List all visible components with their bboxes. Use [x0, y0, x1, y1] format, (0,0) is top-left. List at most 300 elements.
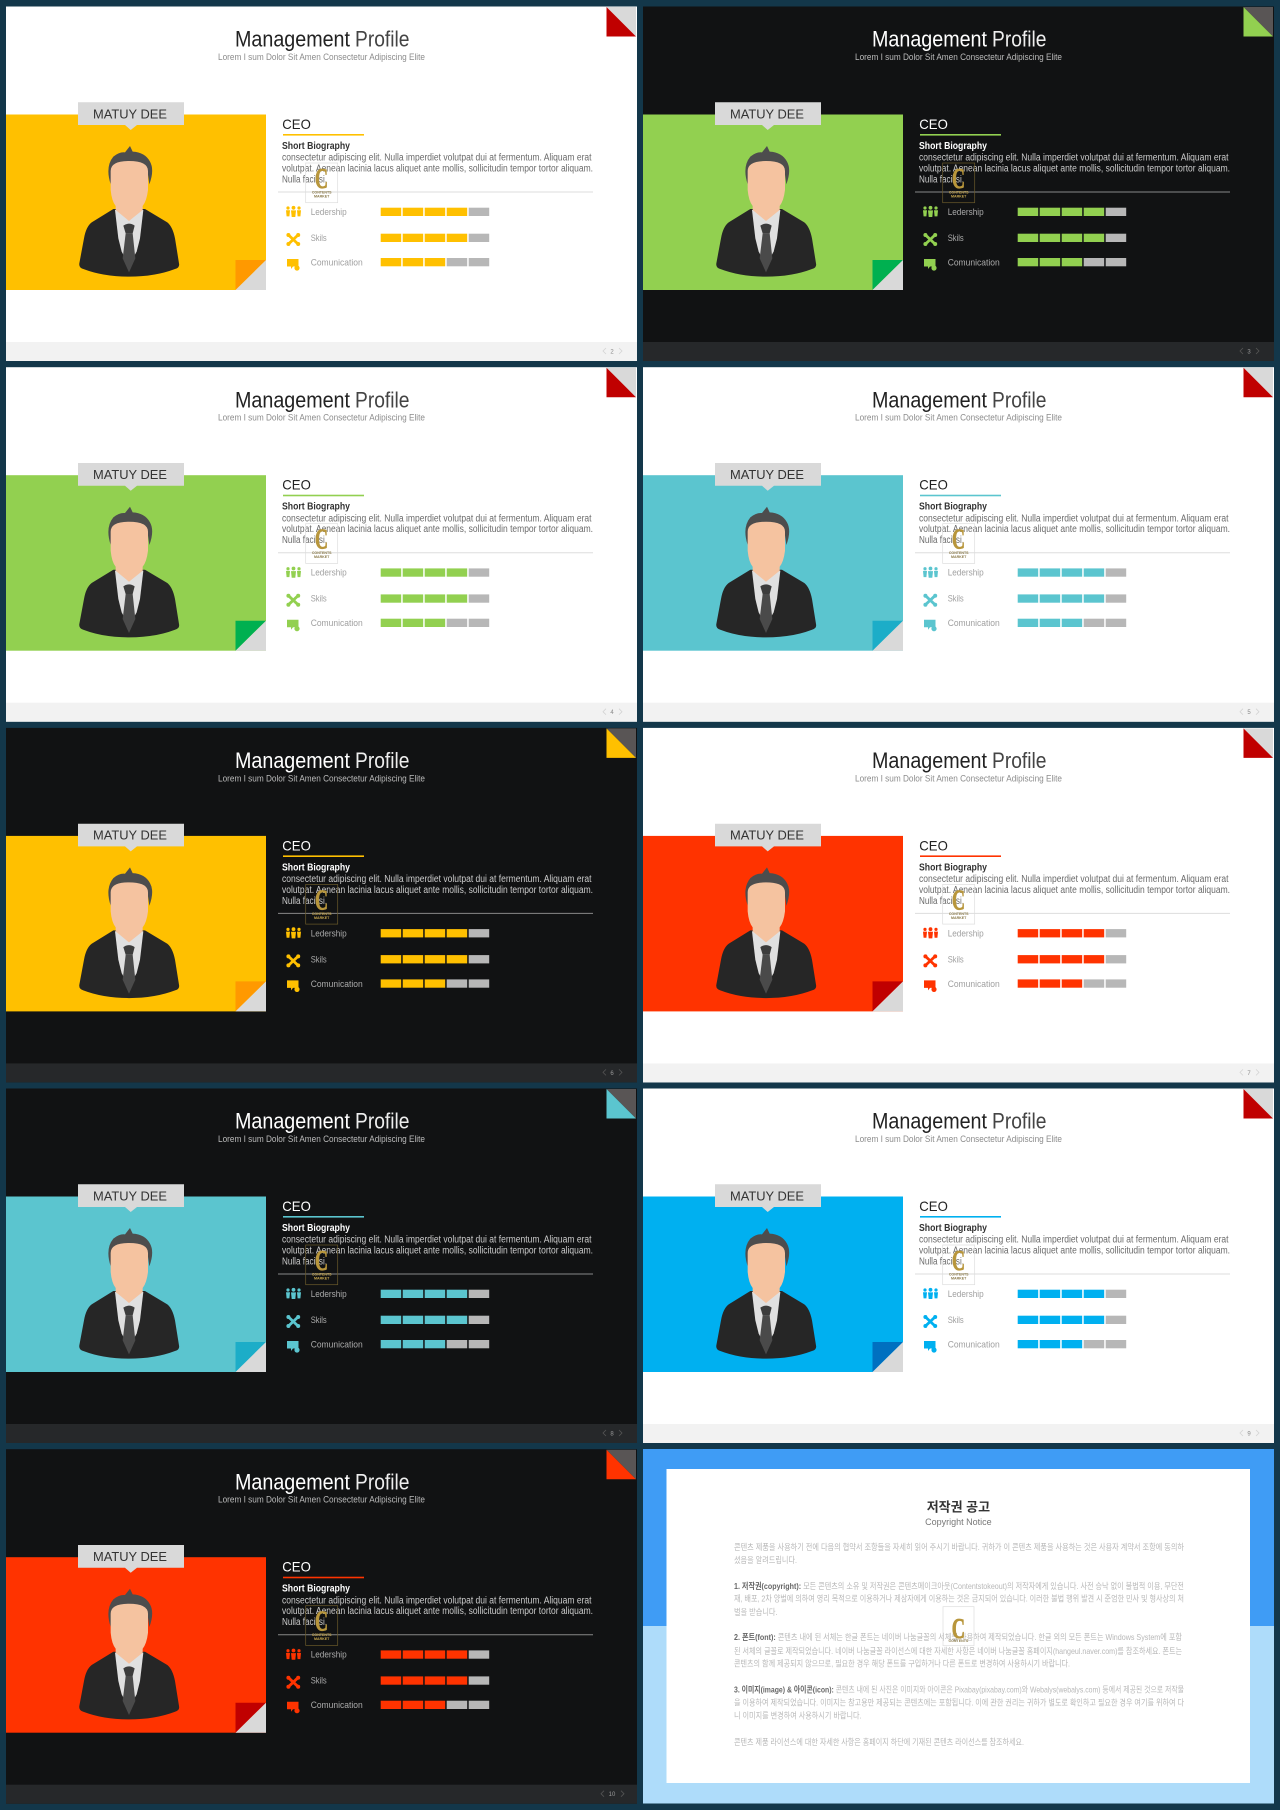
bar: skills: [381, 955, 489, 963]
biography: Nulla facilisi.: [919, 1256, 964, 1268]
icon: leadership: [923, 206, 938, 217]
name tag: MATUY DEE: [730, 829, 804, 843]
watermark: [306, 1606, 338, 1645]
biography: Nulla facilisi.: [282, 1617, 327, 1628]
name tag: MATUY DEE: [93, 829, 167, 843]
color panel: [643, 1196, 903, 1372]
name tag: [78, 102, 184, 130]
watermark: C: [315, 1607, 328, 1638]
bar: skills: [381, 1316, 489, 1324]
role heading: CEO: [282, 1198, 311, 1214]
label: skills: Skils: [948, 1315, 964, 1326]
title: Management: [872, 387, 987, 412]
biography: consectetur adipiscing elit. Nulla imperdiet volutpat dui at fermentum. Aliquam erat: [919, 513, 1229, 524]
page number: 8: [610, 1432, 614, 1438]
biography: [282, 862, 593, 907]
biography: Nulla facilisi.: [919, 535, 964, 546]
label: communication: Comunication: [948, 258, 1000, 268]
role underline: [283, 1577, 364, 1578]
icon: leadership: [923, 1288, 938, 1299]
role heading: CEO: [919, 1198, 948, 1214]
icon: leadership: [286, 1288, 301, 1299]
color panel: [6, 1196, 266, 1372]
watermark: CONTENTS: [312, 912, 332, 916]
footer bar: [643, 1424, 1274, 1443]
watermark: CONTENTS: [312, 1272, 332, 1276]
bar: skills: [1018, 594, 1126, 603]
biography: Nulla facilisi.: [282, 174, 327, 186]
slide background: [6, 728, 637, 1082]
watermark: MARKET: [951, 555, 967, 559]
bar: leadership: [381, 208, 489, 216]
biography: Nulla facilisi.: [919, 896, 964, 907]
watermark: MARKET: [314, 194, 330, 198]
biography: consectetur adipiscing elit. Nulla imperdiet volutpat dui at fermentum. Aliquam erat: [919, 874, 1229, 885]
watermark: [306, 163, 338, 203]
page number: 4: [610, 710, 614, 716]
label: skills: Skils: [311, 954, 327, 965]
corner fold: [606, 368, 636, 397]
page number: [1240, 1430, 1259, 1438]
color panel: [6, 836, 266, 1011]
slide 7: red on white: [643, 728, 1274, 1082]
bar: communication: [381, 619, 489, 627]
page number: 2: [610, 350, 614, 356]
biography: volutpat. Aenean lacinia lacus aliquet ante mollis, sollicitudin tempor tortor aliquam.: [282, 1606, 593, 1617]
corner fold: [1244, 728, 1273, 758]
slide 3: green on black: [643, 6, 1274, 361]
label: communication: Comunication: [948, 618, 1000, 629]
role underline: [283, 134, 364, 136]
label: communication: Comunication: [311, 1700, 363, 1711]
icon: skills: [286, 1676, 300, 1689]
bar: skills: [381, 1676, 489, 1685]
page number: [1240, 709, 1259, 716]
label: leadership: Ledership: [948, 928, 984, 939]
watermark: MARKET: [314, 916, 330, 920]
label: communication: Comunication: [948, 1340, 1000, 1350]
page number: [603, 348, 622, 356]
slide 4: green on white: [6, 367, 637, 722]
icon: skills: [923, 594, 937, 607]
name tag: [78, 463, 184, 491]
biography: consectetur adipiscing elit. Nulla imperdiet volutpat dui at fermentum. Aliquam erat: [919, 153, 1229, 164]
icon: leadership: [923, 927, 938, 938]
watermark: C: [952, 525, 965, 556]
watermark: MARKET: [314, 1637, 330, 1641]
subtitle: Lorem I sum Dolor Sit Amen Consectetur Adipiscing Elite: [855, 1134, 1062, 1144]
bar: leadership: [1018, 208, 1126, 216]
watermark: CONTENTS: [949, 1272, 969, 1276]
section 1: copyright: [734, 1581, 1184, 1617]
watermark: C: [952, 164, 965, 195]
label: communication: Comunication: [311, 258, 363, 268]
color panel: [6, 114, 266, 290]
role underline: [283, 855, 364, 857]
watermark: [943, 163, 975, 203]
icon: leadership: [923, 567, 938, 578]
biography: consectetur adipiscing elit. Nulla imperdiet volutpat dui at fermentum. Aliquam erat: [919, 1235, 1229, 1246]
label: skills: Skils: [948, 233, 964, 244]
watermark: MARKET: [951, 194, 967, 198]
bar: communication: [381, 1340, 489, 1348]
icon: skills: [923, 954, 937, 967]
label: communication: Comunication: [948, 979, 1000, 990]
intro paragraph: 콘텐츠 제품을 사용하기 전에 다음의 협약서 조항들을 자세히 읽어 주시기 바랍니다. 귀하가 이 콘텐츠 제품을 사용하는 것은 사용자 계약서 조항에 동의하: [734, 1542, 1184, 1552]
icon: communication: [287, 1341, 300, 1353]
bar: leadership: [1018, 568, 1126, 577]
icon: communication: [287, 1702, 300, 1713]
name tag: [78, 824, 184, 851]
bar: communication: [381, 979, 489, 988]
title: Management: [235, 1109, 350, 1134]
title: Management: [872, 27, 987, 52]
biography: volutpat. Aenean lacinia lacus aliquet ante mollis, sollicitudin tempor tortor aliquam.: [919, 524, 1230, 535]
footer bar: [6, 1063, 637, 1082]
notice subheading: Copyright Notice: [925, 1517, 992, 1527]
bar: skills: [381, 234, 489, 242]
label: skills: Skils: [948, 594, 964, 605]
blue background top: [643, 1449, 1274, 1626]
slide 10: red on black: [6, 1449, 637, 1804]
biography: Short Biography: [282, 141, 350, 152]
icon: skills: [923, 1315, 937, 1328]
section 1: copyright: 벌을 받습니다.: [734, 1607, 778, 1617]
title: Profile: [992, 748, 1046, 773]
watermark: C: [952, 1246, 965, 1277]
slide 9: blue on white: [643, 1088, 1274, 1443]
page number: 7: [1247, 1071, 1251, 1077]
watermark: [306, 884, 338, 924]
biography: consectetur adipiscing elit. Nulla imperdiet volutpat dui at fermentum. Aliquam erat: [282, 513, 592, 524]
role underline: [920, 855, 1001, 857]
biography: [919, 1223, 1230, 1268]
biography: consectetur adipiscing elit. Nulla imperdiet volutpat dui at fermentum. Aliquam erat: [282, 874, 592, 885]
color panel: [643, 114, 903, 290]
corner fold: [606, 728, 636, 758]
label: leadership: Ledership: [311, 568, 347, 579]
role underline: [920, 1216, 1001, 1218]
watermark: CONTENTS: [949, 1639, 969, 1643]
page number: 3: [1247, 350, 1251, 356]
label: skills: Skils: [948, 954, 964, 965]
light blue background bottom: [643, 1626, 1274, 1804]
biography: volutpat. Aenean lacinia lacus aliquet ante mollis, sollicitudin tempor tortor aliquam.: [282, 1246, 593, 1256]
watermark: C: [315, 525, 328, 556]
subtitle: Lorem I sum Dolor Sit Amen Consectetur Adipiscing Elite: [218, 413, 425, 423]
page number: [603, 1069, 622, 1077]
page number: [603, 709, 622, 716]
watermark: [943, 1245, 975, 1285]
slide background: [6, 6, 637, 361]
biography: Short Biography: [282, 1223, 350, 1234]
biography: Short Biography: [919, 502, 987, 513]
slide 8: teal on black: [6, 1088, 637, 1443]
watermark: CONTENTS: [949, 190, 969, 194]
biography: consectetur adipiscing elit. Nulla imperdiet volutpat dui at fermentum. Aliquam erat: [282, 153, 592, 164]
page number: 9: [1247, 1432, 1251, 1438]
title: Profile: [355, 1469, 410, 1494]
portrait: [79, 1228, 179, 1359]
label: communication: Comunication: [311, 1340, 363, 1350]
watermark: CONTENTS: [949, 912, 969, 916]
title: Management: [235, 27, 350, 52]
portrait: [716, 507, 816, 637]
label: leadership: Ledership: [311, 207, 347, 218]
title: Profile: [355, 387, 410, 412]
corner fold: [606, 1450, 636, 1479]
name tag: MATUY DEE: [93, 468, 167, 482]
icon: leadership: [286, 567, 301, 578]
slide background: [6, 1449, 637, 1804]
icon: skills: [286, 954, 300, 967]
corner fold: [1244, 368, 1273, 397]
icon: skills: [286, 594, 300, 607]
watermark: C: [315, 885, 328, 916]
watermark: CONTENTS: [312, 190, 332, 194]
bar: communication: [1018, 619, 1126, 627]
icon: communication: [287, 259, 300, 271]
portrait: [716, 146, 816, 277]
slide background: [643, 1088, 1274, 1443]
title: Profile: [355, 1109, 410, 1134]
watermark: C: [315, 1246, 328, 1277]
slide 2: yellow on white: [6, 6, 637, 361]
bar: leadership: [381, 568, 489, 577]
subtitle: Lorem I sum Dolor Sit Amen Consectetur Adipiscing Elite: [218, 1134, 425, 1144]
role heading: CEO: [282, 1559, 311, 1575]
bar: leadership: [1018, 929, 1126, 937]
biography: consectetur adipiscing elit. Nulla imperdiet volutpat dui at fermentum. Aliquam erat: [282, 1595, 592, 1606]
biography: consectetur adipiscing elit. Nulla imperdiet volutpat dui at fermentum. Aliquam erat: [282, 1235, 592, 1246]
icon: skills: [286, 1315, 300, 1328]
bar: leadership: [381, 929, 489, 937]
label: leadership: Ledership: [948, 1289, 984, 1300]
biography: Short Biography: [282, 502, 350, 513]
biography: volutpat. Aenean lacinia lacus aliquet ante mollis, sollicitudin tempor tortor aliquam.: [919, 885, 1230, 896]
watermark: [943, 524, 975, 563]
biography: [919, 502, 1230, 546]
bar: skills: [1018, 1316, 1126, 1324]
watermark: [943, 884, 975, 924]
footer bar: [6, 703, 637, 722]
subtitle: Lorem I sum Dolor Sit Amen Consectetur Adipiscing Elite: [218, 1495, 425, 1505]
bar: leadership: [381, 1650, 489, 1659]
footer bar: [6, 1424, 637, 1443]
bar: skills: [381, 594, 489, 603]
title: Profile: [355, 748, 410, 773]
role heading: CEO: [919, 116, 948, 132]
name tag: MATUY DEE: [93, 1189, 167, 1203]
role heading: CEO: [282, 837, 311, 853]
bar: communication: [381, 258, 489, 266]
label: leadership: Ledership: [948, 568, 984, 579]
color panel: [6, 1557, 266, 1733]
icon: leadership: [286, 927, 301, 938]
notice heading: 저작권 공고: [927, 1500, 990, 1514]
watermark: [306, 1245, 338, 1285]
label: leadership: Ledership: [311, 1650, 347, 1661]
icon: communication: [924, 980, 937, 992]
slide background: [643, 367, 1274, 722]
portrait: [79, 1589, 179, 1719]
portrait: [716, 1228, 816, 1359]
slide background: [6, 367, 637, 722]
portrait: [79, 507, 179, 637]
biography: Short Biography: [282, 862, 350, 873]
section 2: font: 2. 폰트(font): 콘텐츠 내에 된 서체는 한글 폰트는 네이버 나눔글꼴의 서체를 사용하여 제작되었습니다. 한글 외의 모든 폰트는 Windows System에 포함: [734, 1632, 1182, 1642]
icon: communication: [924, 259, 937, 271]
role underline: [283, 495, 364, 496]
icon: leadership: [286, 1649, 301, 1660]
biography: Nulla facilisi.: [282, 896, 327, 907]
role underline: [920, 495, 1001, 496]
intro paragraph: 셨음을 알려드립니다.: [734, 1555, 797, 1565]
closing line: 콘텐츠 제품 라이선스에 대한 자세한 사항은 홈페이지 하단에 기재된 콘텐츠 라이선스를 참조하세요.: [734, 1737, 1024, 1747]
portrait: [716, 867, 816, 998]
icon: leadership: [286, 206, 301, 217]
section 2: font: [734, 1632, 1182, 1668]
section 2: font: 콘텐츠의 함께 제공되지 않으므로, 필요한 경우 해당 폰트를 구입하거나 다른 폰트로 변경하여 사용하시기 바랍니다.: [734, 1658, 1070, 1668]
label: leadership: Ledership: [948, 207, 984, 218]
footer bar: [6, 1785, 637, 1804]
page number: [1240, 1069, 1259, 1077]
section 3: image and icon: 3. 이미지(image) & 아이콘(icon): 콘텐츠 내에 된 사진은 이미지와 아이콘은 Pixabay(pixabay.com)와 Webalys(webalys.com) 등에서 제공된 것으로 저작물: [734, 1684, 1184, 1694]
icon: communication: [924, 1341, 937, 1353]
name tag: MATUY DEE: [93, 1550, 167, 1564]
biography: [919, 141, 1230, 186]
name tag: [715, 102, 821, 130]
biography: [282, 1223, 593, 1268]
watermark: [306, 524, 338, 563]
name tag: [78, 1184, 184, 1212]
name tag: MATUY DEE: [93, 107, 167, 121]
name tag: MATUY DEE: [730, 468, 804, 482]
section 3: image and icon: 니 이미지를 변경하여 사용하시기 바랍니다.: [734, 1710, 862, 1720]
icon: communication: [924, 620, 937, 631]
role heading: CEO: [919, 477, 948, 493]
name tag: [715, 824, 821, 851]
label: skills: Skils: [311, 1315, 327, 1326]
biography: volutpat. Aenean lacinia lacus aliquet ante mollis, sollicitudin tempor tortor aliquam.: [282, 885, 593, 896]
biography: Short Biography: [282, 1584, 350, 1595]
portrait: [79, 146, 179, 277]
footer bar: [643, 1063, 1274, 1082]
page number: [1240, 348, 1259, 356]
watermark: MARKET: [314, 1276, 330, 1280]
role heading: CEO: [919, 837, 948, 853]
bar: communication: [1018, 1340, 1126, 1348]
label: communication: Comunication: [311, 979, 363, 990]
footer bar: [643, 703, 1274, 722]
watermark: C: [315, 164, 328, 195]
footer bar: [6, 342, 637, 361]
biography: Short Biography: [919, 862, 987, 873]
corner fold: [1244, 1089, 1273, 1118]
section 3: image and icon: 을 이용하여 제작되었습니다. 이미지는 참고용만 제공되는 콘텐츠에는 포함됩니다. 이에 관한 권리는 귀하가 별도로 확인하고 필요한 경우 여기를 위하여 다: [734, 1698, 1184, 1708]
slide background: [643, 728, 1274, 1082]
watermark: CONTENTS: [949, 551, 969, 555]
section 3: image and icon: [734, 1684, 1184, 1720]
name tag: MATUY DEE: [730, 1189, 804, 1203]
corner fold: [606, 1089, 636, 1118]
bar: communication: [1018, 258, 1126, 266]
watermark: MARKET: [314, 555, 330, 559]
icon: skills: [286, 233, 300, 246]
watermark: CONTENTS: [312, 1633, 332, 1637]
label: skills: Skils: [311, 233, 327, 244]
watermark: MARKET: [951, 916, 967, 920]
slide 6: yellow on black: [6, 728, 637, 1082]
page number: 5: [1247, 710, 1251, 716]
biography: Short Biography: [919, 1223, 987, 1234]
watermark: CONTENTS: [312, 551, 332, 555]
label: skills: Skils: [311, 1676, 327, 1687]
biography: Short Biography: [919, 141, 987, 152]
subtitle: Lorem I sum Dolor Sit Amen Consectetur Adipiscing Elite: [218, 773, 425, 783]
color panel: [643, 836, 903, 1011]
corner fold: [1244, 7, 1273, 36]
icon: communication: [287, 620, 300, 631]
label: leadership: Ledership: [311, 928, 347, 939]
page number: [603, 1430, 622, 1438]
color panel: [6, 475, 266, 651]
footer bar: [643, 342, 1274, 361]
color panel: [643, 475, 903, 651]
section 2: font: 된 서체의 글꼴로 제작되었습니다. 네이버 나눔글꼴 라이선스에 대한 자세한 사항은 네이버 나눔글꼴 홈페이지(hangeul.naver.com)를 참조하세요. 폰트는: [734, 1646, 1182, 1656]
title: Management: [872, 1109, 987, 1134]
corner fold: [606, 7, 636, 36]
biography: Nulla facilisi.: [282, 535, 327, 546]
white notice card: [666, 1469, 1250, 1783]
name tag: [78, 1545, 184, 1573]
bar: communication: [1018, 979, 1126, 988]
label: skills: Skils: [311, 594, 327, 605]
label: communication: Comunication: [311, 618, 363, 629]
biography: [919, 862, 1230, 907]
subtitle: Lorem I sum Dolor Sit Amen Consectetur Adipiscing Elite: [855, 413, 1062, 423]
title: Management: [235, 387, 350, 412]
watermark: C: [952, 885, 965, 916]
name tag: [715, 1184, 821, 1212]
name tag: MATUY DEE: [730, 107, 804, 121]
slide background: [643, 6, 1274, 361]
role underline: [920, 134, 1001, 136]
page number: 10: [609, 1792, 616, 1798]
watermark: [943, 1607, 974, 1646]
portrait: [79, 867, 179, 998]
biography: [282, 502, 593, 546]
section 1: copyright: 재, 배포, 2차 양벌에 의하여 영리 목적으로 이용하거나 제삼자에게 이용하는 것은 금지되어 있습니다. 이러한 불법 행위 발견 시 준엄한 민사 및 형사상의 처: [734, 1594, 1184, 1604]
slide background: [6, 1088, 637, 1443]
slide 5: teal on white: [643, 367, 1274, 722]
role underline: [283, 1216, 364, 1218]
bar: skills: [1018, 234, 1126, 242]
slide 11: copyright notice: [643, 1449, 1274, 1804]
bar: leadership: [381, 1290, 489, 1298]
role heading: CEO: [282, 116, 311, 132]
biography: Nulla facilisi.: [919, 174, 964, 186]
subtitle: Lorem I sum Dolor Sit Amen Consectetur Adipiscing Elite: [855, 52, 1062, 62]
name tag: [715, 463, 821, 491]
watermark: C: [952, 1614, 965, 1645]
label: leadership: Ledership: [311, 1289, 347, 1300]
page number: [601, 1791, 624, 1798]
watermark: MARKET: [951, 1276, 967, 1280]
subtitle: Lorem I sum Dolor Sit Amen Consectetur Adipiscing Elite: [218, 52, 425, 62]
section 1: copyright: 1. 저작권(copyright): 모든 콘텐츠의 소유 및 저작권은 콘텐츠메이크아웃(Contentstokeout)의 저작자에게 있습니다. 사전 승낙 없이 불법적 이용, 무단전: [734, 1581, 1184, 1591]
biography: [282, 1584, 593, 1628]
